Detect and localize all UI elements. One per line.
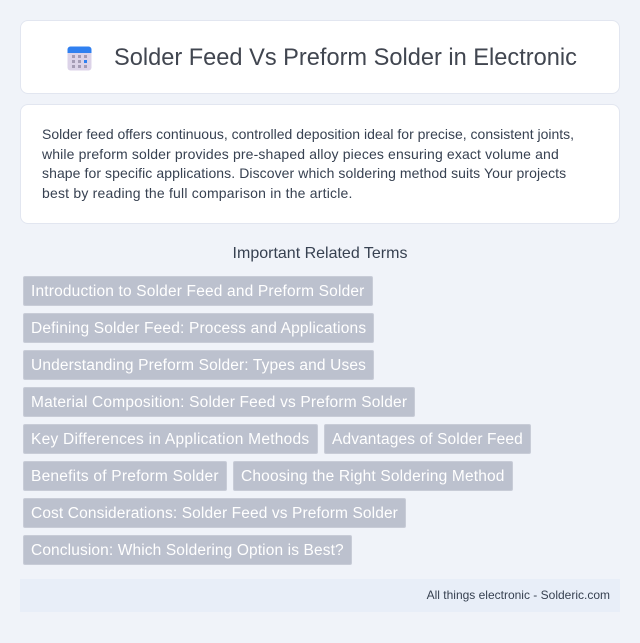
tag: benefits: Benefits of Preform Solder <box>31 468 219 485</box>
footer bar <box>20 579 620 612</box>
tag: conclusion <box>23 535 352 565</box>
tag: key differences: Key Differences in Application Methods <box>31 431 309 448</box>
header card <box>20 20 620 94</box>
tag: material: Material Composition: Solder Feed vs Preform Solder <box>31 394 407 411</box>
intro text panel <box>20 104 620 224</box>
tag: key differences <box>23 424 318 454</box>
intro paragraph: shape for specific applications. Discover which soldering method suits Your projects <box>42 165 566 181</box>
intro paragraph: while preform solder provides pre-shaped alloy pieces ensuring exact volume and <box>42 146 559 162</box>
intro paragraph: best by reading the full comparison in the article. <box>42 184 353 200</box>
tag: introduction: Introduction to Solder Feed and Preform Solder <box>31 283 365 300</box>
tag: defining <box>23 313 374 343</box>
intro paragraph: Solder feed offers continuous, controlled deposition ideal for precise, consistent joints, <box>42 126 574 142</box>
tag: choosing <box>233 461 513 491</box>
footer credit: All things electronic - Solderic.com <box>427 588 610 602</box>
tag: introduction <box>23 276 373 306</box>
tag: defining: Defining Solder Feed: Process and Applications <box>31 320 366 337</box>
tag: advantages: Advantages of Solder Feed <box>332 431 523 448</box>
tag: choosing: Choosing the Right Soldering Method <box>241 468 505 485</box>
term tags <box>23 276 531 565</box>
section heading: Important Related Terms <box>233 245 407 262</box>
tag: advantages <box>324 424 531 454</box>
tag: conclusion: Conclusion: Which Soldering Option is Best? <box>31 542 344 559</box>
icon: calendar <box>68 46 92 70</box>
tag: material <box>23 387 415 417</box>
tag: understanding: Understanding Preform Solder: Types and Uses <box>31 357 366 374</box>
tag: benefits <box>23 461 227 491</box>
tag: cost: Cost Considerations: Solder Feed vs Preform Solder <box>31 505 398 522</box>
intro paragraph <box>42 126 574 201</box>
title: Solder Feed Vs Preform Solder in Electronic <box>114 45 577 71</box>
tag: cost <box>23 498 406 528</box>
tag: understanding <box>23 350 374 380</box>
